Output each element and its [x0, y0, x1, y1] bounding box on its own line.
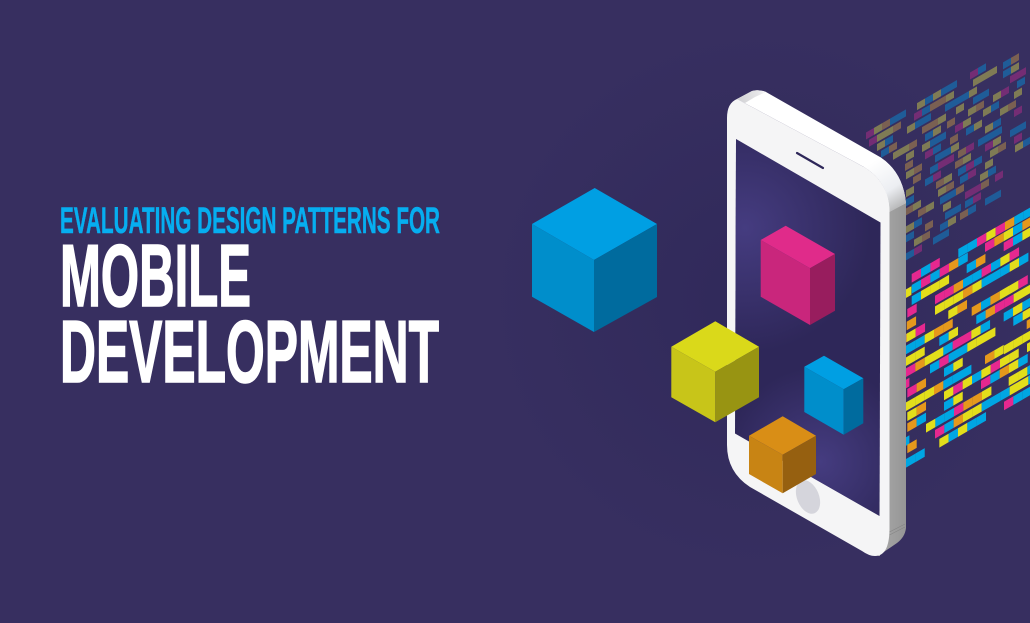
subtitle: EVALUATING DESIGN PATTERNS FOR — [60, 199, 440, 241]
phone front face — [727, 99, 890, 556]
cube: large blue — [532, 188, 657, 332]
cube: yellow — [671, 321, 759, 422]
cube: small blue — [804, 356, 863, 435]
phone screen — [735, 139, 880, 516]
phone rim corners — [864, 157, 906, 212]
bottom edge lines — [890, 524, 905, 535]
soft shadow around phone — [490, 30, 1030, 570]
phone side edge — [878, 190, 906, 556]
smartphone — [727, 90, 906, 556]
home button — [791, 477, 825, 517]
cube: orange — [749, 416, 816, 493]
title line 2: DEVELOPMENT — [60, 302, 439, 401]
data stream: dim bars — [866, 53, 1030, 260]
phone top rim — [737, 90, 906, 212]
data stream: bright bars — [897, 206, 1030, 468]
cube: magenta — [761, 226, 835, 325]
speaker slot — [797, 153, 823, 168]
title line 1: MOBILE — [60, 226, 251, 325]
